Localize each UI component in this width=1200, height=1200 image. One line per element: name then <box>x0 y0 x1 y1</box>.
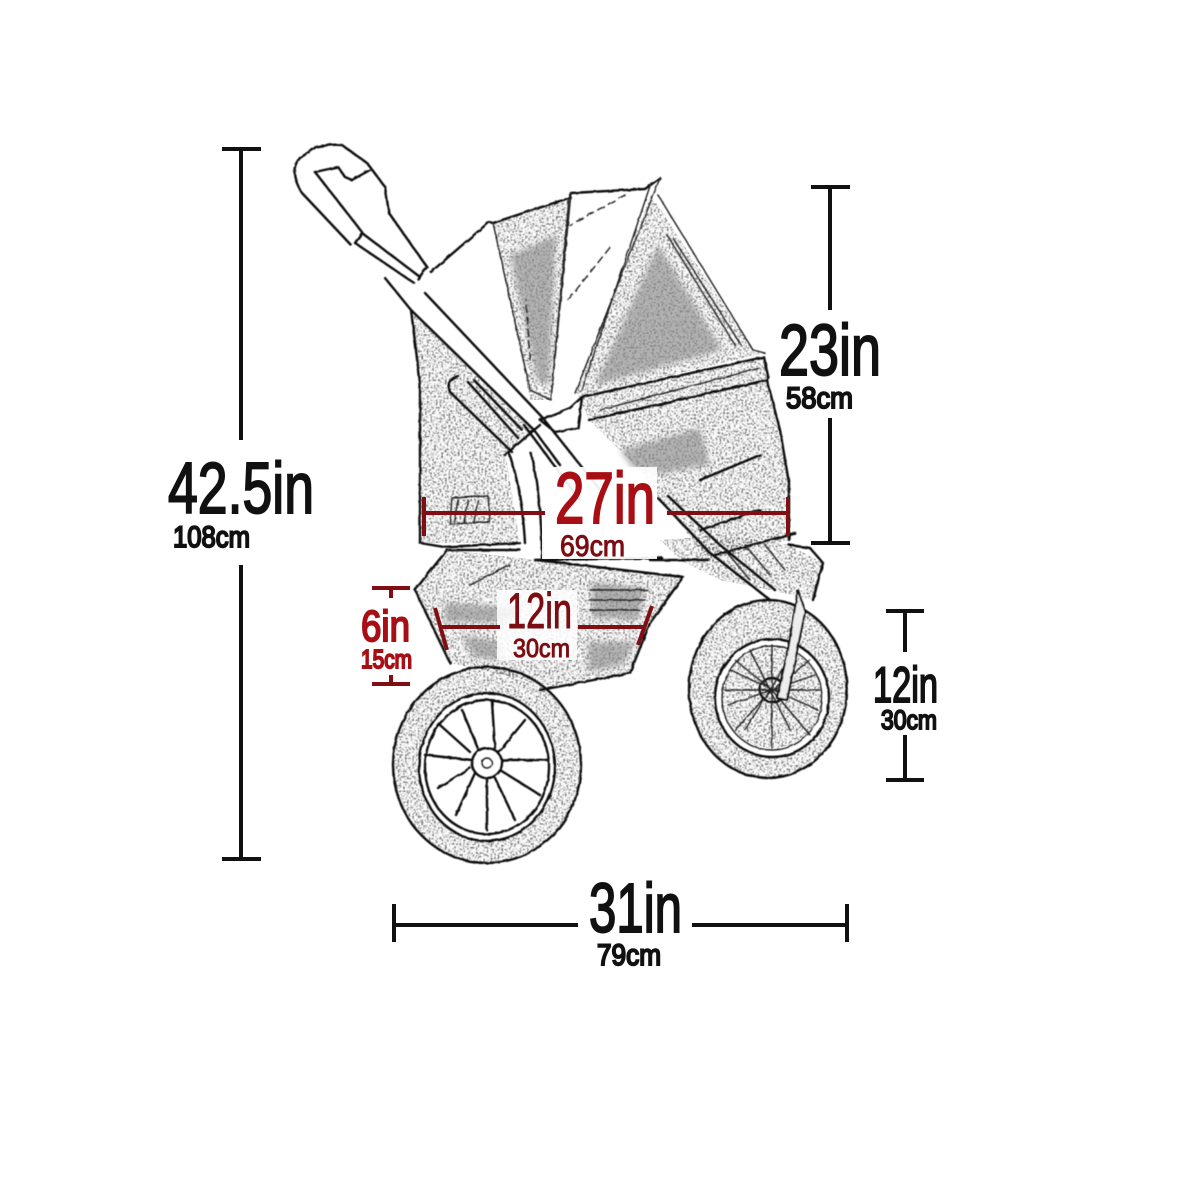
dimension: hood height 23in: 23in <box>779 311 881 391</box>
side pocket <box>449 376 540 455</box>
dimension: basket width 12in: 30cm <box>513 633 570 663</box>
dimension: basket width 12in <box>435 583 652 663</box>
basket outline <box>415 550 683 690</box>
dimension: overall height 42.5in: 42.5in <box>168 449 314 529</box>
handlebar <box>294 145 427 279</box>
canopy band and hinge <box>540 357 768 432</box>
hood back panel <box>431 178 660 272</box>
dimension: wheel diameter 12in <box>873 611 938 780</box>
dimension: basket depth 6in <box>361 588 412 684</box>
stroller illustration <box>294 145 848 863</box>
dimension: basket depth 6in: 6in <box>361 602 410 651</box>
dimension: interior length 27in: 69cm <box>560 530 625 563</box>
front fork <box>777 590 805 700</box>
front basket outline <box>535 380 789 560</box>
dimension: interior length 27in <box>424 459 788 563</box>
handlebar inner grip <box>315 167 370 232</box>
dimension: wheel diameter 12in: 30cm <box>881 705 937 735</box>
dimension: hood height 23in: 58cm <box>786 382 853 415</box>
front wheel <box>689 590 847 778</box>
dimension: overall height 42.5in: 108cm <box>173 521 250 554</box>
dimension: hood height 23in <box>779 187 881 543</box>
rear wheel <box>393 667 581 863</box>
dimension: overall length 31in: 31in <box>589 869 682 947</box>
stroller texture: shaded fabric areas <box>392 190 848 863</box>
dimension: wheel diameter 12in: 12in <box>873 657 938 713</box>
rear body outline <box>411 310 542 560</box>
stroller linework <box>294 145 847 863</box>
leg and footrest <box>658 496 823 600</box>
dimension: overall length 31in: 79cm <box>597 939 661 972</box>
dimension: overall length 31in <box>394 869 847 972</box>
dimension: basket width 12in: 12in <box>507 583 572 639</box>
frame <box>411 293 600 500</box>
dimension: basket depth 6in: 15cm <box>361 644 412 674</box>
rear storage tag <box>450 496 490 524</box>
dimension: interior length 27in: 27in <box>555 459 655 539</box>
handle tubes <box>355 233 420 310</box>
dimension: overall height 42.5in <box>168 149 314 859</box>
